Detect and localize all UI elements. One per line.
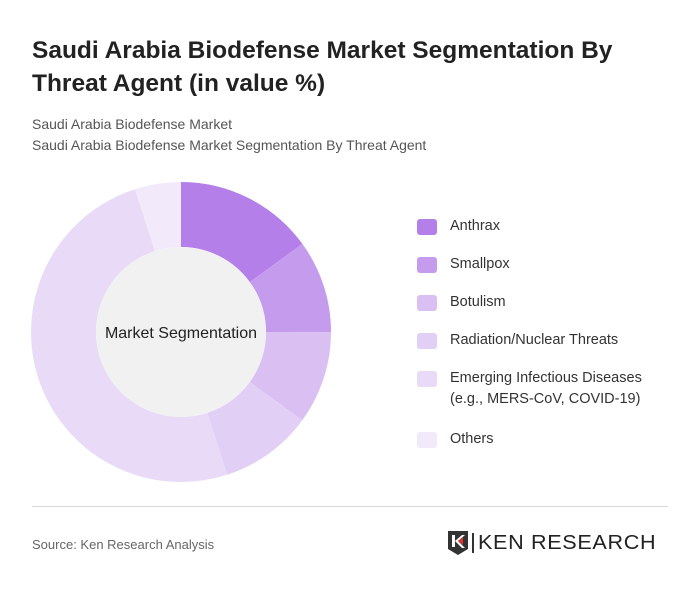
- center label: Market Segmentation: [105, 325, 257, 342]
- legend: Smallpox: Smallpox: [450, 256, 510, 272]
- legend: Botulism: [417, 294, 506, 311]
- center label: [96, 247, 266, 417]
- legend: Emerging: Emerging Infectious Diseases: [450, 370, 642, 386]
- subtitle: Saudi Arabia Biodefense Market Segmentation By Threat Agent: [32, 137, 426, 153]
- logo: KEN RESEARCH: [478, 532, 656, 554]
- legend: Anthrax: Anthrax: [450, 218, 500, 234]
- subtitle: Saudi Arabia Biodefense Market: [32, 116, 232, 132]
- segment: Emerging: [64, 214, 298, 450]
- legend: Others: [417, 431, 494, 448]
- segment: Botulism: [64, 214, 298, 450]
- subtitle: [32, 116, 426, 153]
- segment: Others: [64, 214, 298, 450]
- legend: Radiation: Radiation/Nuclear Threats: [450, 332, 618, 348]
- source: Source: Ken Research Analysis: [32, 537, 214, 552]
- legend: Others: Others: [450, 431, 494, 447]
- legend: Smallpox: [417, 256, 510, 273]
- legend: [417, 218, 642, 448]
- title: Saudi Arabia Biodefense Market Segmentation By Threat Agent (in value %): [32, 37, 612, 97]
- legend: Emerging: (e.g., MERS-CoV, COVID-19): [450, 391, 640, 407]
- legend: Anthrax: [417, 218, 500, 235]
- segment: Radiation: [64, 214, 298, 450]
- legend: Botulism: Botulism: [450, 294, 506, 310]
- segment: Anthrax: [64, 214, 298, 450]
- legend: Emerging: [417, 370, 642, 407]
- segment: Smallpox: [64, 214, 298, 450]
